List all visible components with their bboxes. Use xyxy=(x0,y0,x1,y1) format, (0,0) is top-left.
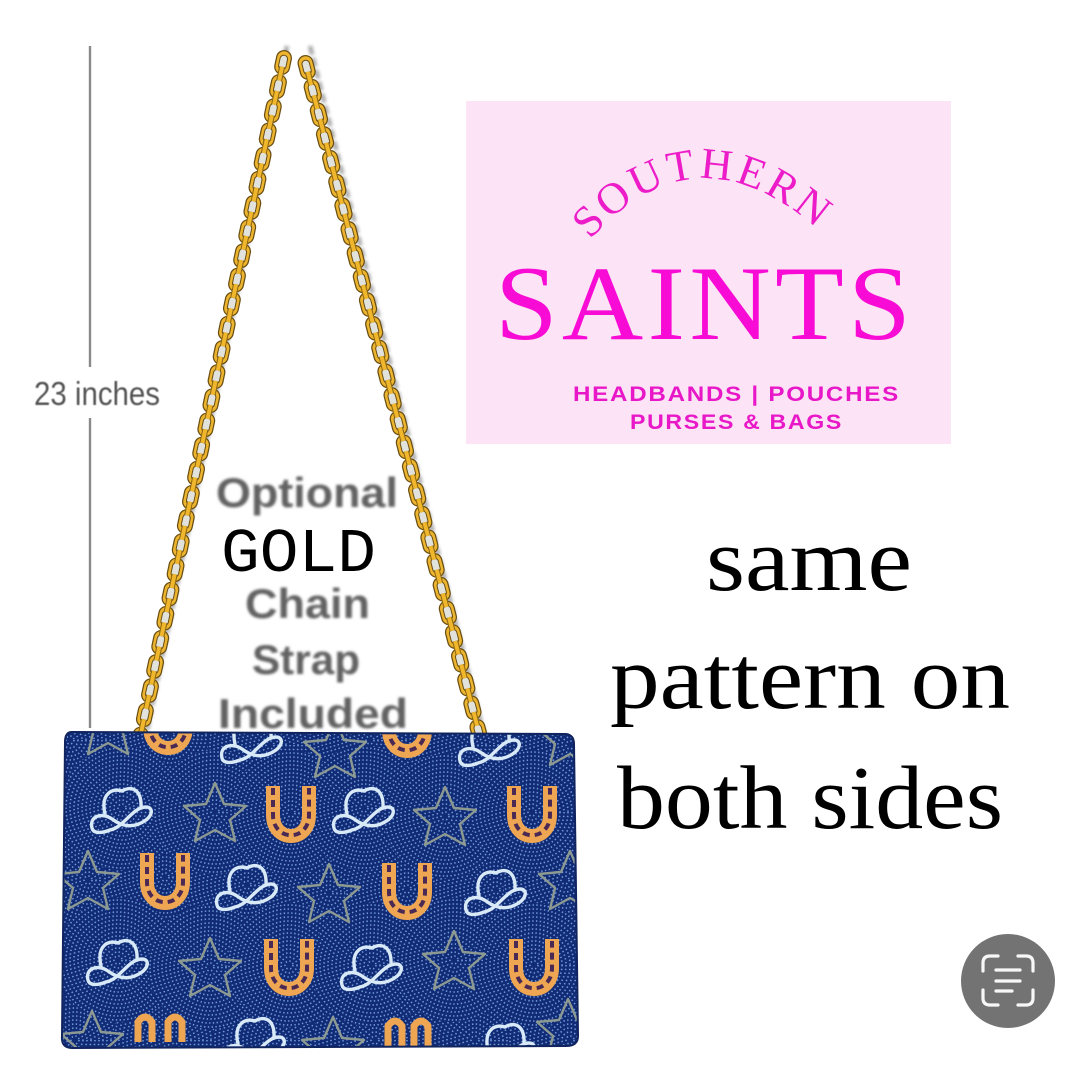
panel: Southern Saints logo xyxy=(466,101,951,444)
top row motifs xyxy=(86,733,574,778)
caption: optional gold chain strap included: Optional xyxy=(216,469,398,516)
caption: optional gold chain strap included: Included xyxy=(218,690,408,737)
logo arc path and word SOUTHERN: SOUTHERN xyxy=(574,148,834,237)
third row motifs xyxy=(57,851,601,922)
caption: optional gold chain strap included: GOLD xyxy=(221,519,376,590)
heading: same pattern on both sides xyxy=(610,511,1010,848)
caption: optional gold chain strap included: Chain xyxy=(245,580,370,627)
right chain xyxy=(306,63,480,735)
logo word SAINTS: SAINTS xyxy=(495,245,915,362)
height dimension line xyxy=(89,46,91,728)
heading: same pattern on both sides: pattern on xyxy=(610,629,1010,728)
label: 23 inches: 23 inches xyxy=(34,375,160,412)
logo tagline xyxy=(573,383,900,434)
logo tagline: PURSES & BAGS xyxy=(630,411,843,434)
left chain xyxy=(141,58,284,735)
chain strap xyxy=(141,46,484,735)
icon: scan text button xyxy=(961,934,1055,1028)
bead texture and motifs xyxy=(8,673,632,1080)
beaded navy bag xyxy=(60,731,579,1049)
bottom row motifs xyxy=(62,998,577,1047)
bag edge xyxy=(62,732,578,1048)
logo tagline: HEADBANDS | POUCHES xyxy=(573,383,900,406)
fourth row motifs xyxy=(88,931,552,996)
chain shadows xyxy=(146,46,484,735)
heading: same pattern on both sides: both sides xyxy=(617,749,1003,848)
bag body xyxy=(62,732,578,1048)
heading: same pattern on both sides: same xyxy=(706,511,912,610)
logo background xyxy=(466,101,951,444)
caption: optional gold chain strap included xyxy=(216,469,408,737)
second row motifs xyxy=(92,783,550,845)
caption: optional gold chain strap included: Strap xyxy=(252,636,360,683)
